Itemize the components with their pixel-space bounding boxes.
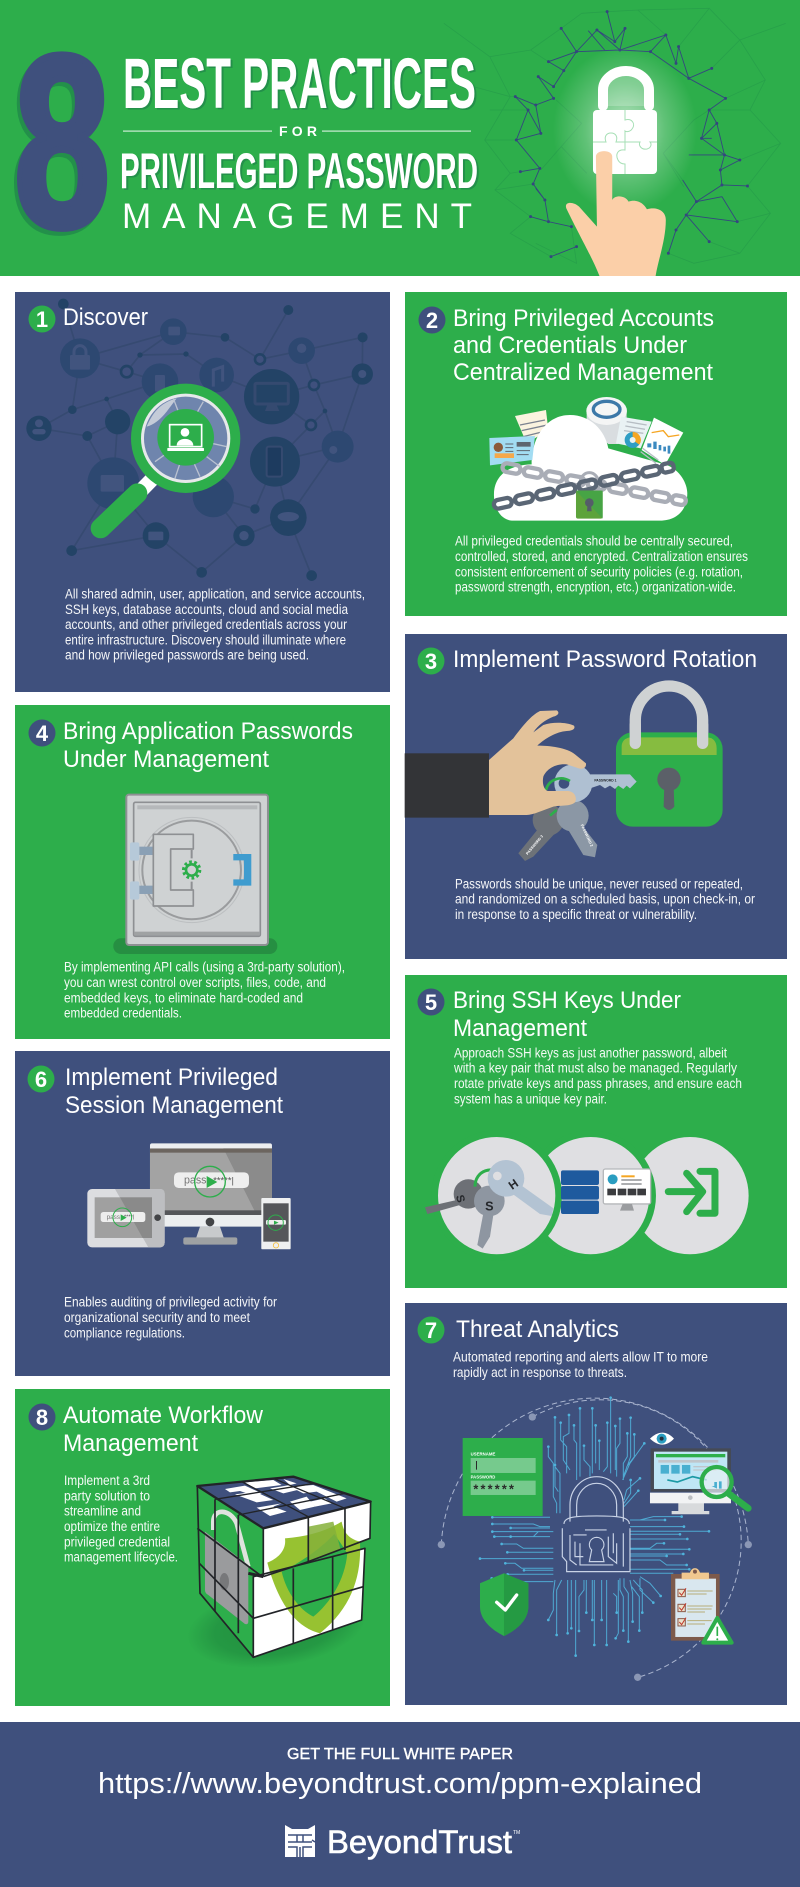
badge 8 bbox=[28, 1404, 56, 1430]
monitor bbox=[150, 1143, 272, 1245]
body text: controlled, stored, and encrypted. Centralization ensures bbox=[455, 549, 748, 564]
body text: embedded credentials. bbox=[64, 1006, 182, 1021]
padlock shackle bbox=[580, 473, 599, 493]
illustration: chained cloud bbox=[489, 397, 687, 521]
badge 6: 6 bbox=[35, 1067, 47, 1092]
tablet bbox=[87, 1189, 165, 1247]
numeral 8: 8 bbox=[14, 4, 110, 278]
badge 2 bbox=[418, 306, 446, 334]
illustration: vault bbox=[113, 795, 277, 954]
eye icon bbox=[650, 1433, 674, 1445]
panel background bbox=[15, 1051, 390, 1376]
panel background bbox=[15, 1389, 390, 1706]
heading: Discover bbox=[63, 304, 148, 331]
body text bbox=[453, 1350, 708, 1380]
analytics monitor bbox=[650, 1448, 748, 1514]
title line 3 shadow: PRIVILEGED PASSWORD bbox=[122, 144, 480, 200]
panel 8: Automate Workflow bbox=[15, 1389, 390, 1706]
BeyondTrust logo: TM bbox=[513, 1830, 520, 1836]
heading: Management bbox=[63, 1430, 198, 1457]
hinges bbox=[130, 842, 157, 900]
body text bbox=[455, 534, 748, 595]
illustration: SSH key circles bbox=[425, 1134, 749, 1258]
heading bbox=[63, 1402, 264, 1457]
illustration: hand with keys and padlock bbox=[405, 686, 723, 861]
body text: you can wrest control over scripts, files, code, and bbox=[64, 975, 326, 990]
left face bbox=[197, 1486, 263, 1657]
panel background bbox=[405, 1303, 787, 1705]
padlock bbox=[616, 686, 723, 827]
body text: system has a unique key pair. bbox=[454, 1091, 607, 1106]
heading: Bring Application Passwords bbox=[63, 718, 353, 745]
body text: management lifecycle. bbox=[64, 1550, 178, 1565]
panel 6: Session Management bbox=[15, 1051, 390, 1376]
badge 8: 8 bbox=[36, 1405, 48, 1430]
monitor bbox=[603, 1169, 651, 1211]
heading: Session Management bbox=[65, 1092, 283, 1119]
call to action: GET THE FULL WHITE PAPER bbox=[287, 1746, 513, 1763]
body text: All privileged credentials should be centrally secured, bbox=[455, 534, 733, 549]
panel 7: Threat Analytics bbox=[405, 1303, 787, 1705]
rule left bbox=[123, 130, 272, 132]
icon: magnifying glass bbox=[101, 384, 240, 528]
key 2 bbox=[557, 800, 597, 857]
panel background bbox=[405, 975, 787, 1288]
body text: Approach SSH keys as just another password, albeit bbox=[454, 1045, 727, 1060]
monitor: pass bbox=[184, 1175, 206, 1187]
title line 4: MANAGEMENT bbox=[122, 197, 472, 236]
body text: SSH keys, database accounts, cloud and social media bbox=[65, 602, 348, 617]
light chain bbox=[502, 463, 687, 506]
illustration: puzzle cube bbox=[182, 1477, 371, 1679]
login panel bbox=[463, 1438, 543, 1516]
badge 7 bbox=[418, 1316, 444, 1344]
body text: Enables auditing of privileged activity for bbox=[64, 1295, 277, 1310]
body text: rotate private keys and pass phrases, and ensure each bbox=[454, 1076, 742, 1091]
body text bbox=[64, 1473, 178, 1565]
body text: entire infrastructure. Discovery should illuminate where bbox=[65, 632, 346, 647]
body text: Passwords should be unique, never reused or repeated, bbox=[455, 876, 743, 891]
circuit traces bbox=[480, 1398, 709, 1656]
keys: S bbox=[485, 1200, 494, 1214]
icon: puzzle padlock bbox=[593, 71, 657, 174]
body text bbox=[453, 1045, 742, 1106]
rule right bbox=[322, 130, 471, 132]
heading: Implement Privileged bbox=[65, 1064, 278, 1091]
monitor: *****| bbox=[213, 1175, 234, 1185]
body text: organizational security and to meet bbox=[64, 1310, 250, 1325]
body text: and randomized on a scheduled basis, upon check-in, or bbox=[455, 892, 755, 907]
tablet: pass bbox=[107, 1214, 120, 1221]
heading: Centralized Management bbox=[453, 359, 713, 386]
lock glow bbox=[553, 46, 697, 214]
badge 5 bbox=[418, 988, 444, 1016]
heading: Threat Analytics bbox=[456, 1316, 619, 1343]
body text: Implement a 3rd bbox=[64, 1473, 150, 1488]
key 2: PASSWORD 2 bbox=[580, 824, 594, 847]
dark chain bbox=[493, 462, 674, 509]
top face bbox=[197, 1477, 371, 1528]
body text: with a key pair that must also be managed. Regularly bbox=[453, 1061, 737, 1076]
body text: Automated reporting and alerts allow IT to more bbox=[453, 1350, 708, 1365]
body text bbox=[64, 960, 345, 1021]
heading bbox=[65, 1064, 283, 1119]
heading bbox=[453, 987, 681, 1042]
heading bbox=[63, 718, 353, 773]
server bbox=[561, 1170, 599, 1214]
padlock on left face bbox=[205, 1512, 248, 1624]
panel 4: Application Passwords bbox=[15, 705, 390, 1039]
body text: compliance regulations. bbox=[64, 1325, 185, 1340]
phone bbox=[261, 1198, 291, 1249]
badge 2: 2 bbox=[426, 308, 438, 333]
database cylinder bbox=[586, 397, 627, 444]
lower right face bbox=[253, 1548, 365, 1657]
handle bbox=[233, 854, 251, 886]
body text bbox=[455, 876, 755, 922]
floor shadow bbox=[113, 938, 277, 954]
body text: consistent enforcement of security policies (e.g. rotation, bbox=[455, 564, 743, 579]
body text bbox=[65, 586, 365, 663]
key 3 bbox=[518, 804, 564, 861]
heading: Implement Password Rotation bbox=[453, 646, 757, 673]
vault body bbox=[126, 795, 268, 945]
badge 7: 7 bbox=[425, 1318, 437, 1343]
upper right face bbox=[263, 1502, 371, 1577]
heading: Bring SSH Keys Under bbox=[453, 987, 681, 1014]
circle 3 bbox=[631, 1137, 749, 1254]
heading: Bring Privileged Accounts bbox=[453, 305, 714, 332]
circle 2 bbox=[529, 1134, 653, 1258]
title FOR: FOR bbox=[279, 123, 317, 139]
illustration: devices bbox=[87, 1143, 291, 1249]
key 1: PASSWORD 1 bbox=[594, 779, 617, 783]
title line 1 shadow: BEST PRACTICES bbox=[125, 46, 478, 126]
footer background bbox=[0, 1722, 800, 1887]
line-chart report bbox=[641, 418, 683, 465]
keys: S bbox=[453, 1194, 467, 1205]
title line 3: PRIVILEGED PASSWORD bbox=[120, 143, 478, 199]
body text: streamline and bbox=[64, 1504, 141, 1519]
login panel: PASSWORD bbox=[471, 1475, 496, 1481]
title line 1: BEST PRACTICES bbox=[123, 45, 476, 124]
ID card bbox=[489, 436, 535, 465]
circuit nodes bbox=[480, 1398, 709, 1656]
footer bbox=[0, 1722, 800, 1887]
circle 1 bbox=[435, 1134, 559, 1258]
panel 5: SSH Keys bbox=[405, 975, 787, 1288]
body text bbox=[64, 1295, 277, 1340]
network mesh around the lock bbox=[444, 8, 786, 263]
body text: password strength, encryption, etc.) organization-wide. bbox=[455, 580, 736, 595]
heading: Automate Workflow bbox=[63, 1402, 264, 1429]
panel background bbox=[15, 292, 390, 692]
login panel: USERNAME bbox=[471, 1452, 496, 1458]
panel 3: Password Rotation bbox=[405, 634, 787, 959]
illustration: threat analytics circuit bbox=[438, 1398, 752, 1681]
icon: pointing hand bbox=[566, 151, 666, 276]
header background bbox=[0, 0, 800, 276]
network background illustration bbox=[26, 299, 373, 581]
body text: accounts, and other privileged credentials across your bbox=[65, 617, 347, 632]
cube shadow bbox=[182, 1575, 371, 1679]
hand bbox=[489, 710, 586, 815]
shield bbox=[267, 1522, 360, 1633]
gear bbox=[184, 862, 200, 878]
heading: and Credentials Under bbox=[453, 332, 687, 359]
cloud bbox=[494, 415, 687, 521]
badge 3 bbox=[418, 648, 444, 674]
body text: By implementing API calls (using a 3rd-party solution), bbox=[64, 960, 345, 975]
body text: in response to a specific threat or vulnerability. bbox=[455, 907, 697, 922]
badge 6 bbox=[28, 1066, 54, 1092]
body text: optimize the entire bbox=[64, 1519, 160, 1534]
body text: privileged credential bbox=[64, 1534, 170, 1549]
body text: and how privileged passwords are being used. bbox=[65, 648, 309, 663]
maze on top face bbox=[225, 1479, 347, 1516]
panel 1: Discover bbox=[15, 292, 390, 692]
heading: Under Management bbox=[63, 746, 269, 773]
badge 4 bbox=[28, 720, 56, 746]
badge 4: 4 bbox=[36, 721, 49, 746]
BeyondTrust logo: BeyondTrust bbox=[327, 1824, 512, 1860]
panel background bbox=[405, 634, 787, 959]
heading: Management bbox=[453, 1015, 587, 1042]
panel background bbox=[405, 292, 787, 616]
badge 1 bbox=[28, 306, 56, 332]
body text: party solution to bbox=[64, 1488, 150, 1503]
pie-chart report bbox=[616, 417, 652, 448]
numeral 8 shadow: 8 bbox=[11, 8, 107, 282]
orbit nodes bbox=[438, 1413, 752, 1681]
panel background bbox=[15, 705, 390, 1039]
body text: embedded keys, to eliminate hard-coded and bbox=[64, 990, 303, 1005]
tablet: ****| bbox=[124, 1215, 134, 1221]
keys: H bbox=[506, 1176, 521, 1193]
arrow icon bbox=[668, 1171, 715, 1213]
badge 5: 5 bbox=[425, 990, 437, 1015]
dashed orbits bbox=[441, 1398, 748, 1677]
cube grid bbox=[197, 1477, 371, 1657]
document bbox=[515, 410, 548, 443]
door plate bbox=[153, 834, 193, 906]
panel 2: Centralized Management bbox=[405, 292, 787, 616]
badge 1: 1 bbox=[36, 307, 48, 332]
body text: rapidly act in response to threats. bbox=[453, 1365, 627, 1380]
checklist clipboard bbox=[671, 1568, 732, 1643]
central padlock bbox=[562, 1477, 630, 1572]
body text: All shared admin, user, application, and service accounts, bbox=[65, 586, 365, 602]
heading bbox=[453, 305, 714, 386]
key 3: PASSWORD 3 bbox=[525, 834, 544, 856]
badge 3: 3 bbox=[425, 649, 437, 674]
key 1 bbox=[546, 764, 637, 816]
login panel: ****** bbox=[473, 1483, 514, 1497]
header banner bbox=[0, 0, 800, 282]
sleeve bbox=[405, 753, 489, 818]
padlock bbox=[576, 491, 603, 519]
security shield bbox=[480, 1573, 528, 1636]
keys bbox=[425, 1160, 553, 1249]
URL: https://www.beyondtrust.com/ppm-explained bbox=[98, 1768, 702, 1800]
